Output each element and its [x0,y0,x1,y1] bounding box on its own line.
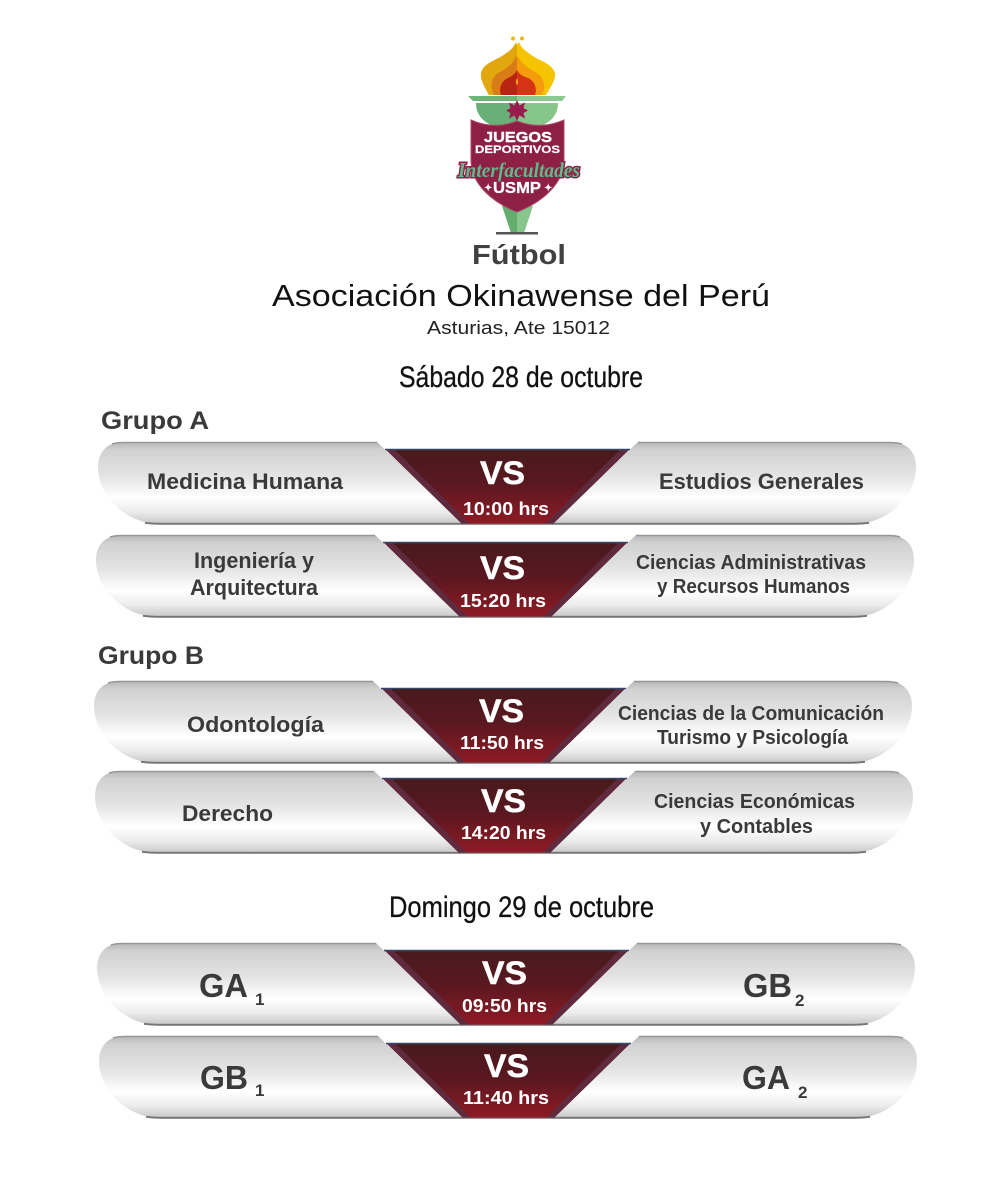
match: Ingeniería y Arquitectura vs Ciencias Administrativas: Ciencias Administrativas [636,552,866,574]
logo text: Juegos: JUEGOS [484,129,552,146]
match: GB1 vs GA2: GA [742,1059,790,1096]
match: Ingeniería y Arquitectura vs Ciencias Administrativas: Arquitectura [190,575,319,600]
match: Odontología vs Ciencias de la Comunicación: VS [479,693,524,729]
match: GB1 vs GA2: VS [484,1048,529,1084]
match: Derecho vs Ciencias Económicas: VS [481,783,526,819]
logo text: Deportivos: DEPORTIVOS [475,144,560,156]
match: GB1 vs GA2: 1 [255,1081,264,1100]
match: GB1 vs GA2 [99,1036,917,1118]
match: Ingeniería y Arquitectura vs Ciencias Administrativas: VS [480,550,525,586]
match: Odontología vs Ciencias de la Comunicación: Turismo y Psicología [657,727,849,749]
match: Medicina Humana vs Estudios Generales [98,442,916,524]
heading: Saturday date: Sábado 28 de octubre [399,361,643,394]
logo text: Interfacultades: Interfacultades [457,158,580,182]
match: GB1 vs GA2: 11:40 hrs [463,1088,549,1108]
match: GA1 vs GB2: 09:50 hrs [462,996,547,1016]
match: GA1 vs GB2 [97,943,915,1025]
match: Odontología vs Ciencias de la Comunicación: 11:50 hrs [460,733,544,753]
match: GB1 vs GA2: GB [200,1059,248,1096]
match: Derecho vs Ciencias Económicas [95,771,913,853]
match: Medicina Humana vs Estudios Generales: 10:00 hrs [463,499,549,519]
logo: Juegos Deportivos Interfacultades USMP torch [457,36,580,234]
match: GB1 vs GA2: 2 [798,1083,807,1102]
match: GA1 vs GB2: VS [482,955,527,991]
match: Ingeniería y Arquitectura vs Ciencias Administrativas: y Recursos Humanos [657,576,850,598]
text: address: Asturias, Ate 15012 [427,318,610,338]
heading: venue: Asociación Okinawense del Perú [272,278,770,313]
match: Derecho vs Ciencias Económicas: Ciencias Económicas [654,791,855,813]
match: GA1 vs GB2: 1 [255,990,264,1009]
match: Ingeniería y Arquitectura vs Ciencias Administrativas [96,535,914,617]
match: GA1 vs GB2: GA [199,967,248,1004]
icon: shield [471,120,564,212]
icon: torch cup [468,96,566,234]
match: Odontología vs Ciencias de la Comunicación: Ciencias de la Comunicación [618,703,884,725]
logo text: left star: ✦ [484,183,492,194]
match: Medicina Humana vs Estudios Generales: Medicina Humana [147,469,344,494]
match: GA1 vs GB2: GB [743,967,792,1004]
match: Odontología vs Ciencias de la Comunicación [94,681,912,763]
logo text: USMP: USMP [493,180,541,197]
match: Derecho vs Ciencias Económicas: 14:20 hrs [461,823,546,843]
match: Medicina Humana vs Estudios Generales: Estudios Generales [659,469,864,494]
icon: torch flame [481,36,555,95]
match: Odontología vs Ciencias de la Comunicación: Odontología [187,712,325,737]
heading: Group A: Grupo A [101,407,209,435]
match: Ingeniería y Arquitectura vs Ciencias Administrativas: Ingeniería y [194,548,315,573]
match: Derecho vs Ciencias Económicas: y Contables [700,816,813,838]
icon: star [506,100,528,121]
heading: Sunday date: Domingo 29 de octubre [389,891,654,924]
match: Medicina Humana vs Estudios Generales: VS [480,455,525,491]
heading: sport: Fútbol [472,239,566,270]
match: Derecho vs Ciencias Económicas: Derecho [182,801,273,826]
logo text: right star: ✦ [544,183,552,194]
heading: Group B: Grupo B [98,642,204,670]
match: Ingeniería y Arquitectura vs Ciencias Administrativas: 15:20 hrs [460,591,546,611]
match: GA1 vs GB2: 2 [795,991,804,1010]
